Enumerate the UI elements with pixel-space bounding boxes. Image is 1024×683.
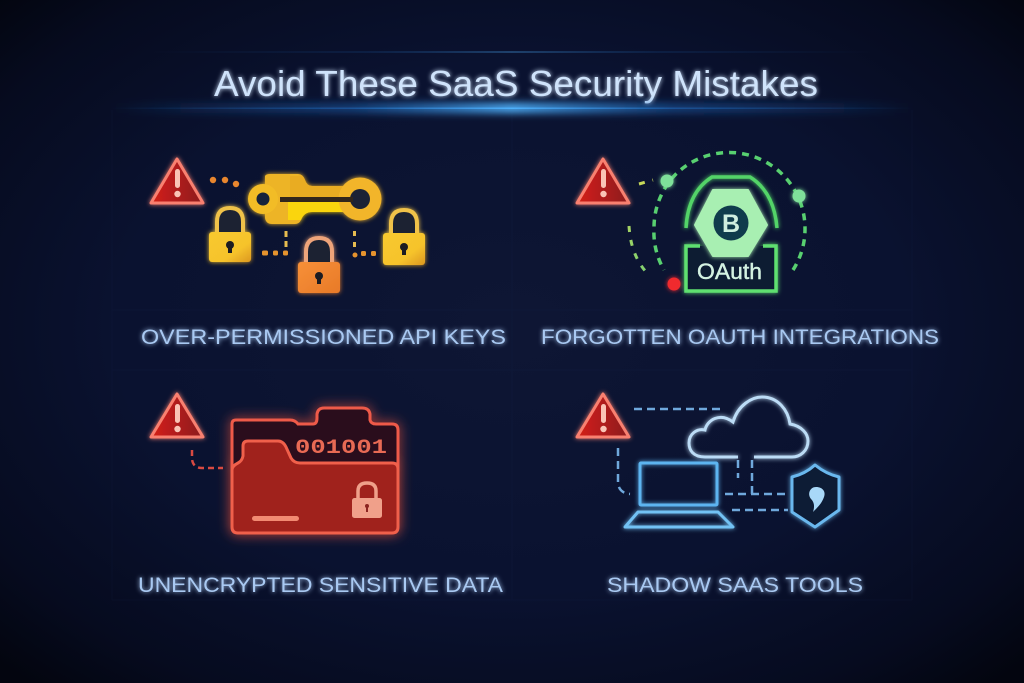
connector dots from warning to key [210,177,239,187]
dashed connectors [618,409,788,510]
icon: OAuth badge [686,177,777,291]
orbit nodes [660,174,806,202]
title: Avoid These SaaS Security Mistakes [214,63,818,104]
icon: warning triangle [577,394,629,437]
icon: yellow key [248,174,382,224]
icon: laptop [625,463,733,527]
panel: unencrypted sensitive data [138,394,504,597]
label: FORGOTTEN OAUTH INTEGRATIONS [541,325,939,349]
icon: yellow padlock left [209,208,251,262]
label: OVER-PERMISSIONED API KEYS [141,325,506,349]
icon: warning triangle [577,159,629,203]
icon: folder padlock [352,483,382,518]
icon: warning triangle [151,394,203,437]
panel: shadow SaaS tools [577,394,863,597]
icon: warning triangle [151,159,203,203]
label: SHADOW SAAS TOOLS [607,573,863,597]
binary digits: 001001 [295,437,387,460]
icon: orange padlock centre [298,238,340,293]
dashed connector [192,450,223,468]
label: UNENCRYPTED SENSITIVE DATA [138,573,504,597]
panel: over-permissioned API keys [141,159,506,349]
icon: shield [792,465,839,527]
panel: forgotten OAuth integrations [541,152,939,349]
title [110,51,914,113]
dashed orbit ring [654,152,805,270]
icon: cloud [689,397,808,457]
folder label bar [252,516,299,521]
icon: OAuth badge: OAuth [697,259,762,284]
icon: yellow padlock right [383,210,425,265]
icon: OAuth badge: B [722,210,740,238]
icon: red folder [232,408,398,533]
outer faded dashed arc [629,180,653,276]
red status node [668,278,680,290]
dotted connectors from key to locks [262,231,376,258]
